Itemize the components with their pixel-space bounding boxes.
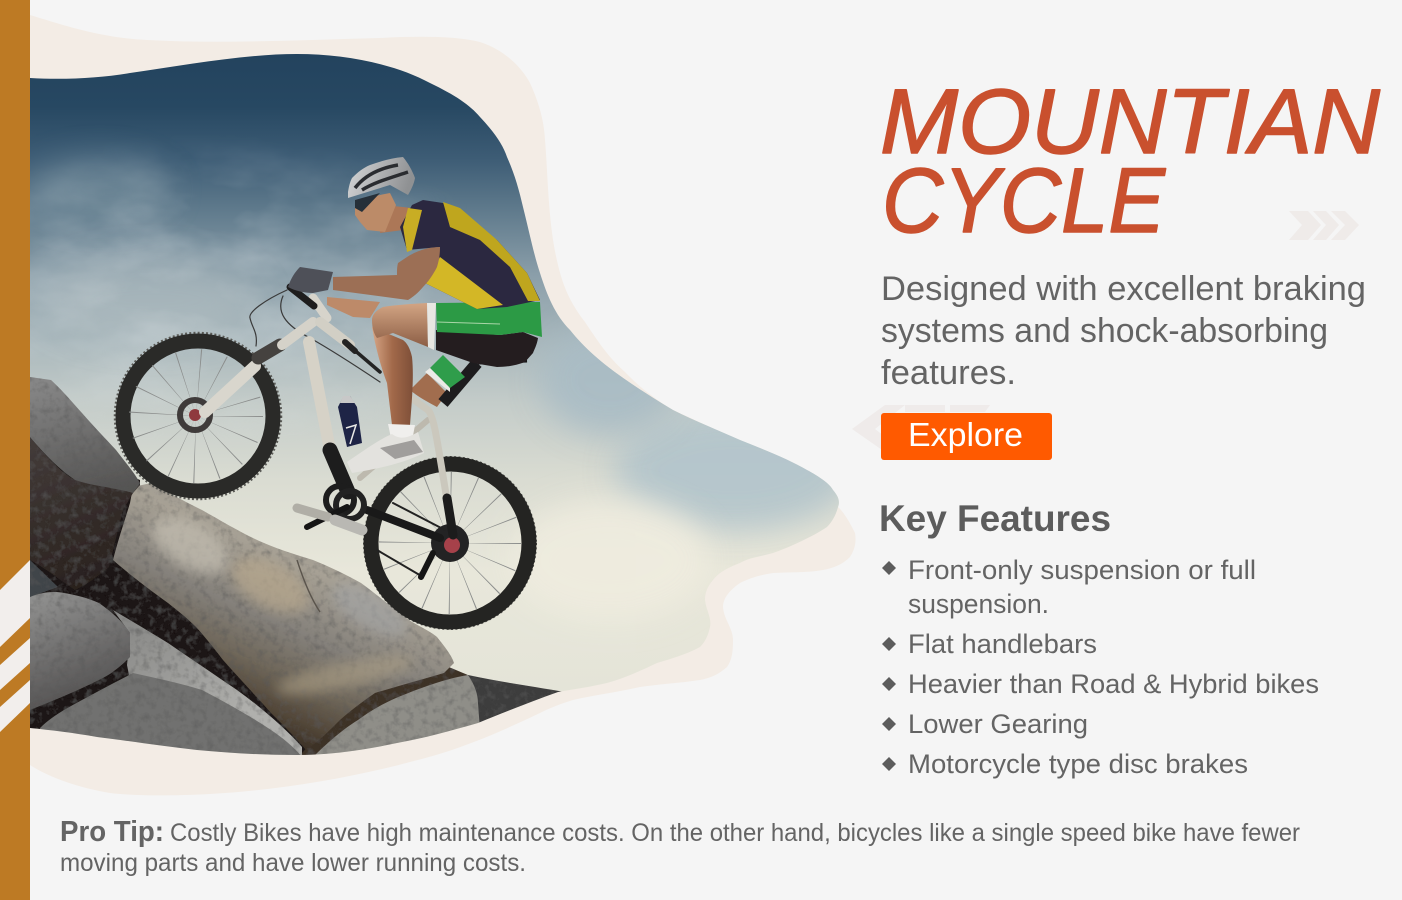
photo: cyclist on rocks (0, 50, 855, 760)
green knee band (430, 355, 465, 388)
boulder highlights (143, 505, 416, 702)
head tube (282, 322, 313, 345)
feature list (882, 555, 1319, 779)
sock (388, 424, 415, 438)
rock: far right dark (468, 675, 562, 722)
title: MOUNTIAN (880, 71, 1381, 173)
shoe (347, 432, 424, 473)
stem (313, 298, 327, 318)
neck (380, 205, 412, 233)
description: systems and shock-absorbing (881, 312, 1328, 350)
chainring (326, 486, 354, 514)
fork suspension (258, 345, 280, 358)
brake cables (250, 290, 287, 346)
rock: bottom front (40, 673, 302, 760)
cyclist (288, 157, 542, 473)
thigh (372, 303, 428, 347)
bicycle frame (205, 287, 453, 577)
shorts hem (427, 303, 436, 350)
rear suspension (410, 397, 447, 500)
calf (372, 327, 413, 425)
pro tip: Pro Tip: (60, 816, 164, 848)
far leg (410, 373, 447, 407)
shorts green (436, 302, 542, 337)
sky (30, 54, 839, 692)
bullet 1: Front-only suspension or full (908, 555, 1256, 585)
rock: back slab (113, 610, 302, 760)
icon: faint chevrons behind button (852, 405, 990, 452)
down tube (309, 342, 330, 450)
face (355, 193, 396, 232)
heading: key features: Key Features (879, 498, 1111, 539)
pro tip: moving parts and have lower running costs. (60, 849, 526, 877)
title (880, 71, 1381, 252)
rock: grey cap (30, 377, 140, 493)
handlebar (290, 287, 314, 306)
jersey (400, 200, 540, 309)
bullet 1 (882, 555, 1256, 619)
helmet (348, 157, 415, 198)
bullet 1: suspension. (908, 589, 1049, 619)
rocks (30, 377, 565, 760)
crank (307, 507, 347, 527)
lower foot (335, 520, 362, 530)
rock: lower right (310, 675, 480, 760)
pedal (297, 508, 328, 517)
icon: faint chevrons right (1289, 211, 1359, 240)
explore button: Explore (908, 416, 1023, 453)
chain stay (367, 510, 440, 538)
glove (288, 267, 333, 293)
water bottle (338, 396, 362, 447)
title: CYCLE (882, 150, 1167, 252)
bullet 4: Lower Gearing (908, 709, 1088, 739)
rear wheel (364, 457, 536, 629)
rock: dark brown mass (30, 437, 140, 590)
top tube (320, 322, 350, 345)
explore button (881, 413, 1052, 460)
fork leg (205, 366, 255, 412)
jersey chest panel (403, 208, 422, 252)
rear link (360, 420, 428, 478)
pro tip (60, 816, 1300, 877)
lower forearm (327, 297, 380, 318)
description: features. (881, 354, 1016, 392)
accent stripes (0, 560, 30, 732)
jersey stripe lower (425, 257, 503, 309)
sunglasses (355, 193, 380, 212)
front wheel (115, 333, 281, 499)
rock: big boulder (113, 483, 454, 750)
left accent bar (0, 0, 30, 900)
shadow gap behind boulders (30, 437, 306, 753)
derailleur (421, 553, 433, 577)
rock: shadowed gap (30, 560, 58, 597)
arm (333, 247, 440, 300)
description (881, 270, 1366, 392)
bullet 3: Heavier than Road & Hybrid bikes (908, 669, 1319, 699)
saddle (478, 360, 527, 362)
bullet 5: Motorcycle type disc brakes (908, 749, 1248, 779)
shorts black (436, 330, 538, 367)
seat post (443, 363, 477, 403)
bullet 2: Flat handlebars (908, 629, 1097, 659)
shadow under big boulder (302, 667, 469, 755)
jersey stripe upper (443, 202, 540, 301)
pro tip: Costly Bikes have high maintenance costs. On the other hand, bicycles like a single speed bike have fewer (170, 819, 1300, 847)
rock: left mid (30, 592, 130, 710)
cream blob backdrop (30, 15, 856, 795)
description: Designed with excellent braking (881, 270, 1366, 308)
